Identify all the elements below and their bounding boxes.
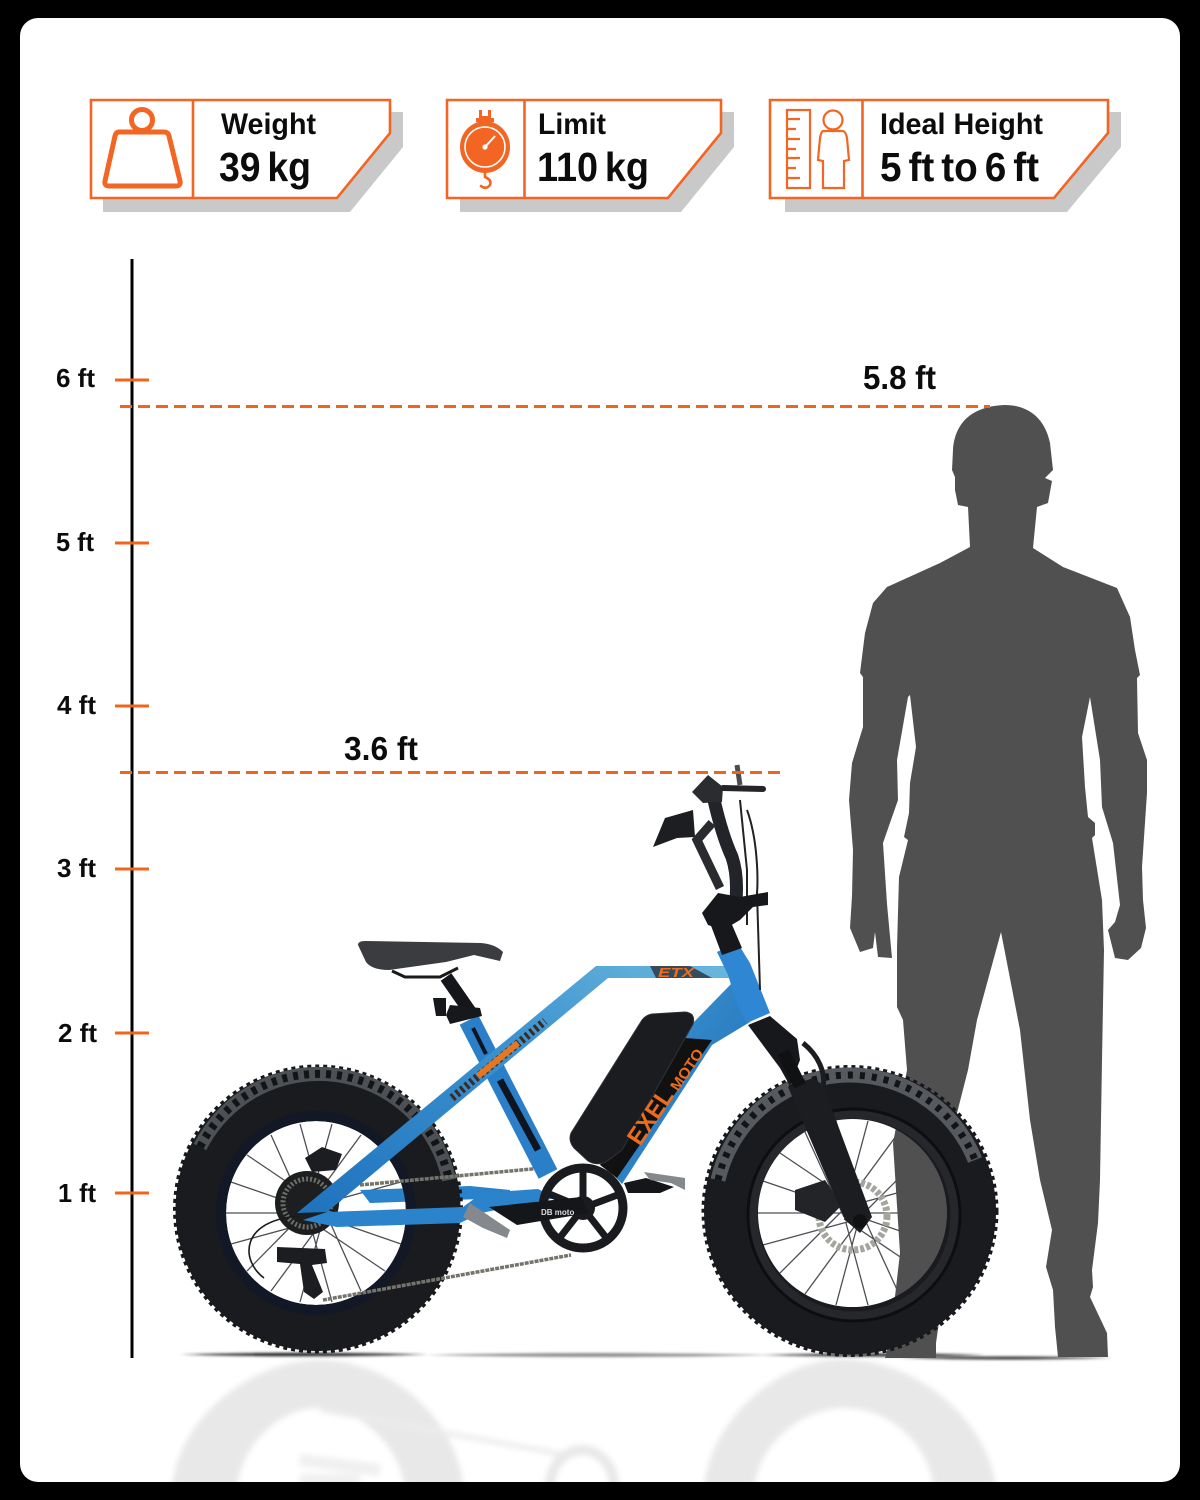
badge: ideal height	[770, 100, 1121, 212]
chainring and crank	[489, 1168, 674, 1248]
axis labels: 6 ft	[56, 363, 95, 393]
down tube logo MOTO: MOTO	[667, 1045, 708, 1094]
axis labels: 1 ft	[58, 1178, 96, 1208]
weight value: 39 kg	[219, 144, 311, 190]
icon: hanging scale	[460, 110, 510, 188]
dashed line: bike height	[120, 771, 780, 774]
mirror stem	[737, 765, 740, 785]
ideal height label: Ideal Height	[880, 108, 1043, 141]
rear derailleur	[277, 1247, 327, 1299]
label: person height: 5.8 ft	[863, 359, 936, 396]
limit label: Limit	[538, 108, 606, 141]
axis labels: 2 ft	[58, 1018, 97, 1048]
second bar	[697, 823, 720, 888]
grip	[692, 775, 723, 803]
chain stay	[303, 1189, 556, 1227]
front wheel	[703, 1066, 997, 1356]
axis labels: 5 ft	[56, 527, 94, 557]
dashed line: person height	[120, 405, 990, 408]
ideal height value: 5 ft to 6 ft	[880, 144, 1039, 190]
frame	[297, 942, 770, 1227]
rear wheel	[174, 1066, 510, 1352]
brake lever	[723, 788, 763, 789]
cables	[740, 800, 760, 990]
disc rotor	[819, 1182, 887, 1250]
limit value: 110 kg	[537, 144, 649, 190]
down tube	[607, 983, 750, 1184]
rear tyre tread	[200, 1074, 449, 1180]
cassette	[275, 1171, 339, 1235]
chain	[323, 1167, 571, 1300]
headlight and clamp	[702, 892, 768, 930]
pedals	[463, 1172, 685, 1238]
label: bike height: 3.6 ft	[344, 730, 418, 767]
top tube logo: ETX	[658, 965, 696, 980]
electric bike	[174, 765, 997, 1356]
badge: weight	[91, 100, 403, 212]
axis labels: 4 ft	[57, 690, 96, 720]
bike reflection	[172, 1358, 996, 1482]
far chain stay	[360, 1186, 510, 1203]
top tube logo band	[650, 966, 712, 978]
icon: ruler and person	[787, 110, 849, 188]
seat post	[446, 977, 471, 1013]
tick marks	[115, 380, 149, 1193]
seat tube	[469, 1020, 548, 1174]
badge: limit	[447, 100, 734, 212]
stem	[710, 920, 742, 955]
chainring and crank: DB moto	[541, 1208, 574, 1217]
down tube logo EXEL: EXEL	[622, 1083, 680, 1150]
front tyre tread	[718, 1075, 975, 1180]
battery	[570, 1012, 694, 1164]
axis labels: 3 ft	[57, 853, 96, 883]
handlebar and cockpit	[653, 765, 768, 990]
icon: weight	[105, 110, 180, 186]
top tube	[297, 966, 738, 1213]
phone mount	[653, 810, 695, 847]
axis labels	[56, 363, 97, 1208]
height axis	[56, 259, 149, 1358]
head tube	[717, 942, 770, 1023]
front fork	[748, 1016, 872, 1233]
main bar	[714, 800, 736, 900]
weight label: Weight	[221, 108, 316, 141]
ground shadow	[180, 1353, 1112, 1360]
person silhouette	[849, 405, 1147, 1358]
seat clamp	[433, 998, 482, 1024]
rear brake	[305, 1147, 342, 1172]
saddle	[358, 941, 503, 977]
frame decal	[452, 1021, 545, 1098]
front brake caliper	[795, 1180, 842, 1222]
